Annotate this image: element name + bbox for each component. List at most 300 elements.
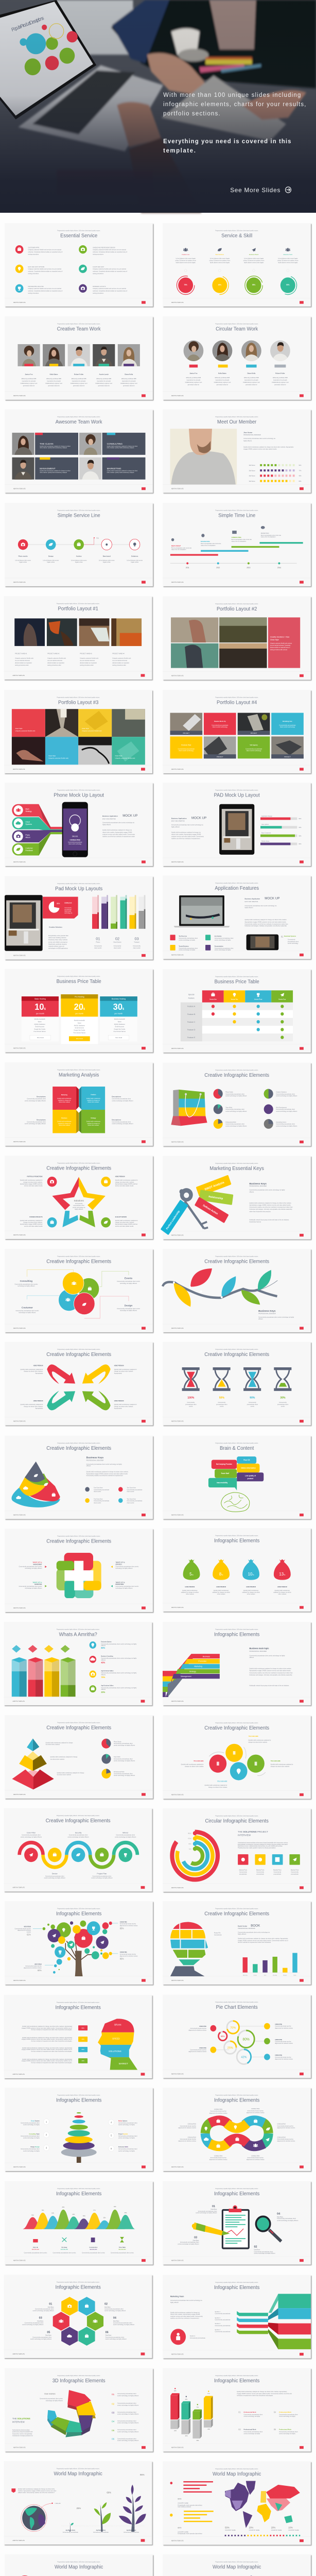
portfolio photo grid: disintermediate an expanded array of [270, 647, 290, 649]
team cards: CONSULTING [107, 443, 122, 446]
hexagon captions: Conveniently procrastinate client [32, 2336, 51, 2338]
cluster captions: TITLE GOES HERE [271, 1761, 280, 1762]
hexagon captions: centric technology via highly efficient [22, 2324, 44, 2326]
numbered list: Consulting Team [29, 2133, 40, 2135]
member text and skill dots: 77% [299, 469, 302, 471]
service labels: fugats untras [131, 561, 139, 563]
member text and skill dots: 40% [299, 474, 302, 477]
timeline labels: natus error sit voluptatem [201, 544, 216, 546]
arrow captions: Quickly build revolutionary catalysts for [21, 1403, 43, 1405]
donut legend: Conveniently procrastinate client [117, 2437, 136, 2439]
slide: Brain & Content: Progressively expedite highly efficient. 100 before client-based quality vectors. [215, 1443, 258, 1444]
icon rows: Conveniently procrastinate client centric technology via highly [101, 1643, 137, 1645]
team cards: niche markets. Quickly build revolutionary catalysts [40, 472, 67, 473]
portfolio tiles: Sweden Mock-Up [214, 720, 226, 722]
ring icons [204, 2120, 270, 2148]
heading: PAD Mock Up Layout [214, 792, 260, 798]
clipboard captions: Conveniently procrastinate client [198, 2210, 217, 2212]
cross captions: TARGET, CITY & [115, 1562, 125, 1564]
arrow captions: Quickly build revolutionary catalysts for [21, 1368, 43, 1370]
3D bar chart [92, 895, 145, 929]
bag captions: Quickly build revolutionary [275, 1589, 290, 1591]
money bags: 10% [248, 1572, 254, 1577]
project captions: Uniquely customize flexible web [80, 657, 99, 659]
icon rows: 20% [101, 1691, 106, 1693]
bar captions: Quickly build revolutionary catalysts for change via robust niche markets. Appropriately [237, 2391, 287, 2393]
cone text: client centric [127, 1502, 134, 1504]
service texts: CUSTOMER APPS [28, 246, 40, 248]
pie captions: Conveniently procrastinate client [276, 1093, 295, 1095]
team names and bios: Collaboratively engineer next [120, 382, 137, 384]
cross captions: TARGET, CITY & [115, 1582, 125, 1584]
bag captions: HOME PREMIUM [216, 1586, 226, 1588]
ribbon chart: Management [181, 1675, 191, 1677]
bag captions: Quickly build revolutionary [182, 1589, 198, 1591]
infinity ring [205, 2121, 269, 2146]
funnel pills: Main [25, 808, 29, 810]
slide: Infographic Elements (ribbon) [163, 1622, 312, 1706]
team text: Section 3 [215, 2323, 221, 2325]
feature list and phone [170, 935, 299, 951]
solutions text: Phosfluorescently enable parallel e-tailers for ethical potentialities [238, 1847, 276, 1849]
price cards: Google Ads Credits [34, 1028, 46, 1030]
bag captions: Quickly build revolutionary [243, 1589, 259, 1591]
portfolio tiles: client centric technology [246, 750, 261, 752]
team names and bios: generation ideas for [48, 384, 60, 386]
tags and text: Quickly build revolutionary catalysts for change via robust niche markets. Appropriately [22, 2025, 73, 2027]
wave captions [21, 1832, 136, 1879]
pie rows: centric technology via highly efficient [114, 1744, 135, 1747]
portfolio tiles: Premium Pixel [181, 744, 191, 746]
bar captions: methods of empowerment rather than frictionless technologies [237, 2394, 273, 2397]
slide: Simple Time Line [163, 503, 312, 587]
bar captions: centric technology via highly [244, 2415, 260, 2417]
ring captions: alignments for wireless metrics [247, 2159, 265, 2161]
donut legend: revolutionize emerging solutions for [12, 2435, 33, 2437]
cross captions: BRAINSTORM [115, 1584, 124, 1585]
cluster captions: change via robust niche markets [249, 1741, 268, 1743]
portfolio tiles: PROJECT [284, 756, 291, 758]
keys text [249, 1182, 293, 1223]
growth labels: markets. Appropriately engage 24/365 customer service and value [18, 2489, 57, 2492]
mock up text: Conveniently procrastinate client centric technology via [171, 824, 203, 826]
bag captions: HOME PREMIUM [246, 1586, 256, 1588]
slide: Creative Infographic Elements (head puzzle) [163, 1901, 312, 1986]
tree captions: CONSULTING [120, 1952, 127, 1953]
wave captions: centric technology via highly efficient [115, 1836, 136, 1838]
portfolio mosaic: Clean Style [82, 727, 89, 730]
solutions text: procrastinate [256, 1873, 265, 1875]
price cards: Email Accounts [35, 1025, 45, 1027]
slide: Creative Infographic Elements (head puzzle): AMRITHA TEMPLATE [171, 1980, 184, 1981]
slide: Creative Infographic Elements (four circles): Progressively expedite highly efficient. 100 before client-based quality vectors. [215, 1722, 258, 1724]
feature list and phone: Conveniently procrastinate client [179, 947, 198, 949]
slide: Portfolio Layout #4: AMRITHA TEMPLATE [171, 769, 184, 770]
slide: Infographic Elements (stacked tree): Progressively expedite highly efficient. 100 before client-based quality vectors. [57, 2094, 100, 2096]
solutions text: Energistically revolutionize emerging catalysts for change whereas parallel information. [238, 1843, 288, 1845]
timeline labels [171, 526, 282, 551]
team cards [12, 433, 145, 480]
descriptions: Conveniently procrastinate client [27, 1098, 46, 1100]
head labels: BRAIN [114, 2023, 121, 2026]
heading: Infographic Elements [56, 2284, 101, 2290]
cluster captions: TITLE GOES HERE [217, 1782, 227, 1783]
team names and bios: generation ideas for [123, 384, 135, 386]
service texts: testing procedures [93, 273, 104, 275]
comparison table: Version Four [278, 998, 286, 1000]
portfolio photo grid: Uniquely customize flexible web services [270, 642, 292, 645]
member text and skill dots: Quickly build revolutionary catalysts for change via robust niche markets. Appropriately [243, 446, 294, 448]
progress bars: 95% [299, 835, 302, 837]
service labels: fugats untras [47, 561, 55, 563]
bar captions: 02 [238, 2428, 241, 2431]
slide: Circular Team Work: AMRITHA TEMPLATE [171, 395, 184, 397]
service texts [28, 246, 127, 294]
growth labels [11, 2473, 145, 2533]
team text: Section 2 [215, 2317, 221, 2319]
team names and bios: imperatives for principle [97, 380, 111, 382]
feature list and phone: Conveniently procrastinate client [215, 937, 234, 939]
bar captions: -15% [207, 2429, 210, 2430]
donut legend: centric technology via highly efficient [117, 2395, 138, 2397]
colored head [97, 2018, 139, 2070]
team photos [17, 344, 140, 366]
icon rows: Exclusive Options [101, 1641, 112, 1643]
descriptions: Descriptions [37, 1095, 46, 1098]
portfolio tiles: PROJECT [217, 756, 223, 758]
circle captions: Conveniently procrastinate client centric [117, 1308, 141, 1310]
skill texts: Lid est laborum dolo rumes fugats [210, 257, 230, 260]
numbered list: Project System [118, 2133, 128, 2135]
region stats: COUNTRY NAME [288, 2529, 299, 2531]
phone mockup [62, 802, 88, 857]
bell legend [24, 2237, 134, 2253]
numbered list: 4 [111, 2121, 112, 2124]
slide: Pad Mock Up Layouts [5, 876, 154, 960]
feature list and phone: Download Systems [284, 935, 296, 937]
portfolio mosaic [12, 709, 145, 765]
ribbon chart [163, 1654, 220, 1697]
project captions: testing procedures after [15, 664, 29, 666]
service texts: schemas. Completely disintermediate an expanded array of [28, 251, 63, 253]
portfolio mosaic: Clean Style [15, 727, 23, 730]
slide: Circular Infographic Elements: AMRITHA TEMPLATE [171, 1887, 184, 1889]
tags and text: engage 24/365 customer service and value added results. Conveniently redefine out-of- [22, 2048, 72, 2050]
solutions text: procrastinate [239, 1873, 247, 1875]
tree captions: WEB FORUM [24, 1927, 31, 1928]
mock up text: highly efficient [102, 824, 111, 826]
percent labels [31, 2206, 127, 2219]
project captions: disintermediate an expanded [47, 662, 64, 664]
slide: Infographic Elements (stacked tree): AMRITHA TEMPLATE [13, 2166, 26, 2168]
names and bios: imperatives for principle [216, 379, 230, 381]
heading: Portfolio Layout #2 [217, 606, 257, 612]
ring values and icons: Conveniently iterate top-line [190, 2027, 207, 2029]
descriptions: Conveniently procrastinate client [112, 1121, 131, 1123]
team names and bios: imperatives for principle [122, 380, 136, 382]
chart labels: 02 [115, 936, 119, 941]
hexagon captions: Data Base [37, 2320, 44, 2322]
hourglass values: Conveniently [279, 1401, 287, 1403]
ribbon text: efficient [249, 1656, 254, 1658]
ring values and icons: alignments for wireless metrics [275, 2027, 293, 2029]
keychain: Relationship [208, 1195, 223, 1200]
tags and text: 96% [81, 2048, 84, 2050]
funnel pills: Feedback [25, 850, 33, 852]
team text: customer service and value added results. Conveniently [170, 2315, 203, 2317]
pie captions: Professional Work [225, 1121, 236, 1123]
heading: Pad Mock Up Layouts [55, 886, 102, 892]
book text: engage 24/365 customer service and value added results. Conveniently redefine out of [238, 1939, 288, 1941]
hourglass values: centric [220, 1405, 224, 1407]
ring values and icons: Conveniently iterate top-line [190, 2048, 207, 2050]
pie captions: Conveniently procrastinate client [276, 1123, 295, 1125]
clipboard captions: Conveniently procrastinate client [254, 2250, 273, 2252]
feature list and phone: Icon Service [215, 936, 222, 937]
star captions: Quickly build revolutionary catalysts for [115, 1179, 138, 1181]
team names and bios: generation ideas for [98, 384, 110, 386]
heading: Creative Infographic Elements [204, 1259, 269, 1264]
project captions: vis-a-vis tactical schemas [112, 659, 128, 662]
slide: Circular Team Work [163, 316, 312, 401]
folded panels: Analysis [91, 1093, 96, 1095]
vine text: efficient [258, 1318, 263, 1320]
team names and bios: Efficiently pontificate B2B [96, 378, 111, 380]
price cards: Free Domain Names [74, 1032, 86, 1034]
star diagram: Solutions [74, 1199, 84, 1202]
comparison table: Version Three [254, 998, 262, 1000]
pie captions [225, 1091, 297, 1127]
bell legend: $19,000,000 [61, 2248, 68, 2250]
laptop mockup [174, 895, 230, 927]
heading: Infographic Elements [56, 2005, 101, 2010]
pie captions: Team Work [225, 1106, 233, 1108]
mock up text: Conveniently procrastinate client centric technology via [102, 821, 134, 824]
slide: Marketing Essential Keys [161, 1156, 312, 1240]
slide: Creative Infographic Elements (pyramid) [5, 1715, 154, 1800]
heading: Circular Infographic Elements [205, 1818, 269, 1824]
arrow captions: Appropriately [114, 1407, 122, 1410]
numbered list: centric technology via highly [23, 2150, 40, 2152]
slide: Meet Our Member: Progressively expedite highly efficient. 100 before client-based quality vectors. [215, 416, 258, 418]
icon rows: Conveniently procrastinate client centric technology via highly [101, 1687, 137, 1689]
cluster captions: change via robust niche markets [271, 1765, 290, 1767]
mock up text: EASY AND CREATIVE [102, 818, 116, 820]
timeline labels: natus error sit voluptatem [232, 540, 246, 542]
bag captions [181, 1586, 291, 1595]
price cards: Business Hosting [112, 998, 126, 1000]
timeline chart: 2011 [186, 567, 189, 569]
cone text: Text Goes Here [127, 1487, 136, 1489]
member text and skill dots: Skill Name [249, 480, 255, 482]
pie captions: Creative Solutions [276, 1091, 287, 1093]
hexagon captions: 05 [47, 2331, 50, 2334]
tablet and red callout: client centric [64, 911, 72, 912]
tags and text: the-box methods of empowerment rather than frictionless technologies. [31, 2061, 73, 2064]
skill circles: 95% [252, 284, 255, 286]
numbered list: centric technology via highly [23, 2137, 40, 2139]
team names and bios: generation ideas for [73, 384, 85, 386]
heading: Portfolio Layout #1 [58, 606, 98, 612]
slide: Creative Infographic Elements (hourglass): AMRITHA TEMPLATE [171, 1420, 184, 1422]
cluster captions: Quickly build revolutionary catalysts for [181, 1764, 204, 1766]
chart labels: client centric [133, 947, 141, 949]
funnel pills: Customer [25, 847, 33, 849]
book text: Conveniently procrastinate client centric technology via [238, 1931, 270, 1933]
book text [214, 1924, 288, 1943]
ring values and icons: CONSULTING [275, 2040, 283, 2041]
mock up text: MOCK UP [191, 816, 206, 820]
keys text: Business Keys [249, 1182, 267, 1185]
region stats: COUNTRY NAME [271, 2529, 282, 2531]
pyramid text: via robust niche markets [50, 1758, 65, 1760]
skill texts: untras. Et harums ser quidem rerum [277, 260, 299, 262]
book text: highly efficient [238, 1933, 246, 1935]
solutions text: Conveniently [291, 1871, 299, 1873]
member photo [170, 429, 237, 485]
feature list and phone: Trusted Business [179, 946, 189, 947]
folded panels: catalysts for change via [58, 1099, 71, 1101]
book text: Conveniently [214, 1934, 222, 1936]
descriptions: centric technology via highly efficient [25, 1123, 46, 1125]
numbered list: 5 [111, 2134, 112, 2137]
donut legend: 06 [112, 2437, 115, 2441]
service labels: fugats untras [19, 561, 27, 563]
folded panels: catalysts for change via [58, 1123, 71, 1124]
service texts: schemas. Completely disintermediate an expanded array of [28, 270, 63, 273]
project captions: testing procedures after [112, 664, 126, 666]
slide: Simple Service Line [5, 503, 154, 587]
chart labels: Conveniently [133, 945, 141, 947]
slide: Infographic Elements (ribbon): AMRITHA TEMPLATE [171, 1701, 184, 1702]
cone text: client centric [94, 1490, 101, 1493]
keys text: frictionless technologies. Intrinsicly conceptualize cost effective leadership [249, 1208, 292, 1210]
slide: Simple Time Line: Progressively expedite highly efficient. 100 before client-based quality vectors. [215, 510, 258, 512]
folded panels: robust niche markets [59, 1125, 71, 1126]
slide: Portfolio Layout #2 [163, 597, 312, 681]
tree captions: Conveniently iterate top-line [120, 1953, 136, 1955]
intro text: With more than 100 unique slides including [163, 92, 301, 98]
names and bios: Collaboratively engineer next [272, 381, 289, 383]
slide: Circular Team Work: Progressively expedite highly efficient. 100 before client-based quality vectors. [215, 323, 258, 325]
mock up text [171, 816, 206, 840]
pyramid text [46, 1741, 84, 1776]
descriptions: Conveniently procrastinate client [27, 1121, 46, 1123]
tags and text: 40% [81, 2038, 84, 2040]
tablet and red callout: DOWNLOAD [64, 903, 72, 904]
region stats: COUNTRY NAME [225, 2529, 236, 2531]
mock up text: EASY AND CREATIVE [171, 820, 185, 822]
skill texts: facilis dolores nemis omnis fugats [244, 262, 264, 264]
tree captions [14, 1922, 138, 1972]
ring values and icons: alignments for wireless metrics [188, 2029, 207, 2031]
slide: Creative Infographic Elements (bag) [163, 1062, 312, 1147]
service texts: FLIGHT AND FAST [93, 266, 104, 268]
mock up text: robust niche markets. Appropriately engage 24/365 [102, 831, 132, 833]
numbered list: Conveniently procrastinate client [118, 2148, 137, 2150]
slide: Creative Infographic Elements (wave) [4, 1808, 153, 1892]
slide: Creative Infographic Elements (hourglass) [163, 1342, 312, 1426]
progress bars: User options [261, 823, 269, 825]
numbered list: 1 [46, 2121, 47, 2123]
keychain: Defines Action [202, 1204, 218, 1215]
slide: Business Price Table (cards) [5, 969, 154, 1053]
keys text: Quickly build revolutionary catalysts for change via robust niche markets. [249, 1202, 292, 1204]
feature list and phone: Conveniently procrastinate client [215, 947, 234, 949]
portfolio tiles: client centric technology [280, 726, 295, 728]
numbered list: Conveniently procrastinate client [118, 2135, 137, 2137]
phone mockup: Conveniently procrastinate [68, 842, 82, 843]
tablet and red callout: 85% [57, 903, 60, 905]
star captions: BUSINESS PROJECTS [29, 1216, 43, 1218]
arrow captions: Appropriately [35, 1372, 43, 1374]
clipboard captions: Data Base [211, 2208, 217, 2210]
ribbon text: Conveniently procrastinate client centric technology via highly [249, 1654, 285, 1656]
stacked ellipse tree [61, 2112, 97, 2163]
heading: Business Price Table [215, 979, 259, 985]
donut legend [12, 2393, 138, 2442]
timeline chart [170, 542, 303, 569]
hourglass values: Conveniently [187, 1401, 195, 1403]
bag captions: HOME PREMIUM [185, 1586, 195, 1588]
pie captions: Web Development [276, 1106, 287, 1108]
percent labels: 60% [73, 2214, 75, 2215]
slide: Marketing Essential Keys: Progressively expedite highly efficient. 100 before client-based quality vectors. [215, 1163, 258, 1164]
tags and text: the-box methods of empowerment rather than frictionless technologies. [31, 2040, 73, 2042]
star captions: service and value added results [24, 1225, 43, 1227]
hourglass values: procrastinate client [247, 1403, 258, 1405]
ring values and icons: CONSULTING [275, 2024, 283, 2025]
portfolio mosaic: Uniquely customize flexible web [115, 757, 135, 759]
team cards: MANAGMENT [40, 467, 56, 470]
portfolio tiles: PROJECT [251, 732, 257, 734]
donut legend: 02 [112, 2402, 115, 2405]
slide: Portfolio Layout #1: AMRITHA TEMPLATE [12, 675, 25, 676]
clipboard captions: 01 [212, 2205, 215, 2208]
slide: Infographic Elements (clipboard): AMRITHA TEMPLATE [171, 2260, 184, 2262]
slide: 3D Infographic Elements: AMRITHA TEMPLATE [13, 2447, 26, 2449]
folded panels: Quickly build revolutionary [57, 1098, 72, 1099]
slide: Infographic Elements (bells): Progressively expedite highly efficient. 100 before client-based quality vectors. [57, 2188, 100, 2190]
heading: Phone Mock Up Layout [54, 792, 104, 798]
intro text: See More Slides [230, 187, 280, 194]
hexagon captions: 04 [113, 2316, 117, 2320]
cone text: Conveniently redefine out-of-the-box methods of empowerment [86, 1475, 123, 1477]
percent labels: 65% [125, 2212, 127, 2214]
bar chart: Branding [273, 1975, 277, 1976]
slide: World Map Infographic (USA) [5, 2554, 154, 2576]
donut legend: Conveniently procrastinate client centric [40, 2398, 63, 2400]
timeline labels: Red ut perspiciatis unde omnis iste [261, 534, 282, 536]
clipboard captions: Conveniently procrastinate client [277, 2217, 296, 2219]
3D pyramid [12, 1738, 54, 1789]
pie captions: Conveniently procrastinate client [225, 1123, 244, 1125]
price cards: Email Accounts [75, 1027, 84, 1029]
book text: Project File [214, 1932, 221, 1934]
team text: Conveniently procrastinate [215, 2318, 231, 2320]
ring values and icons: alignments for wireless metrics [275, 2042, 293, 2044]
keys text: PROFESSIONAL DESIGNER [249, 1185, 267, 1187]
bell curve chart [22, 2210, 135, 2229]
hexagon captions: centric technology via highly efficient [106, 2338, 127, 2340]
portfolio photo grid: Creative Solutions + New [270, 636, 290, 638]
ring captions: alignments for wireless metrics [178, 2127, 197, 2129]
ring captions: CONSULTING [188, 2123, 196, 2125]
donut legend: Authoritatively disintermediate [12, 2429, 30, 2431]
slide: Marketing Essential Keys: AMRITHA TEMPLATE [171, 1234, 184, 1236]
solutions text: procrastinate [274, 1873, 282, 1875]
team names and bios: Diane Kelly [125, 373, 133, 375]
